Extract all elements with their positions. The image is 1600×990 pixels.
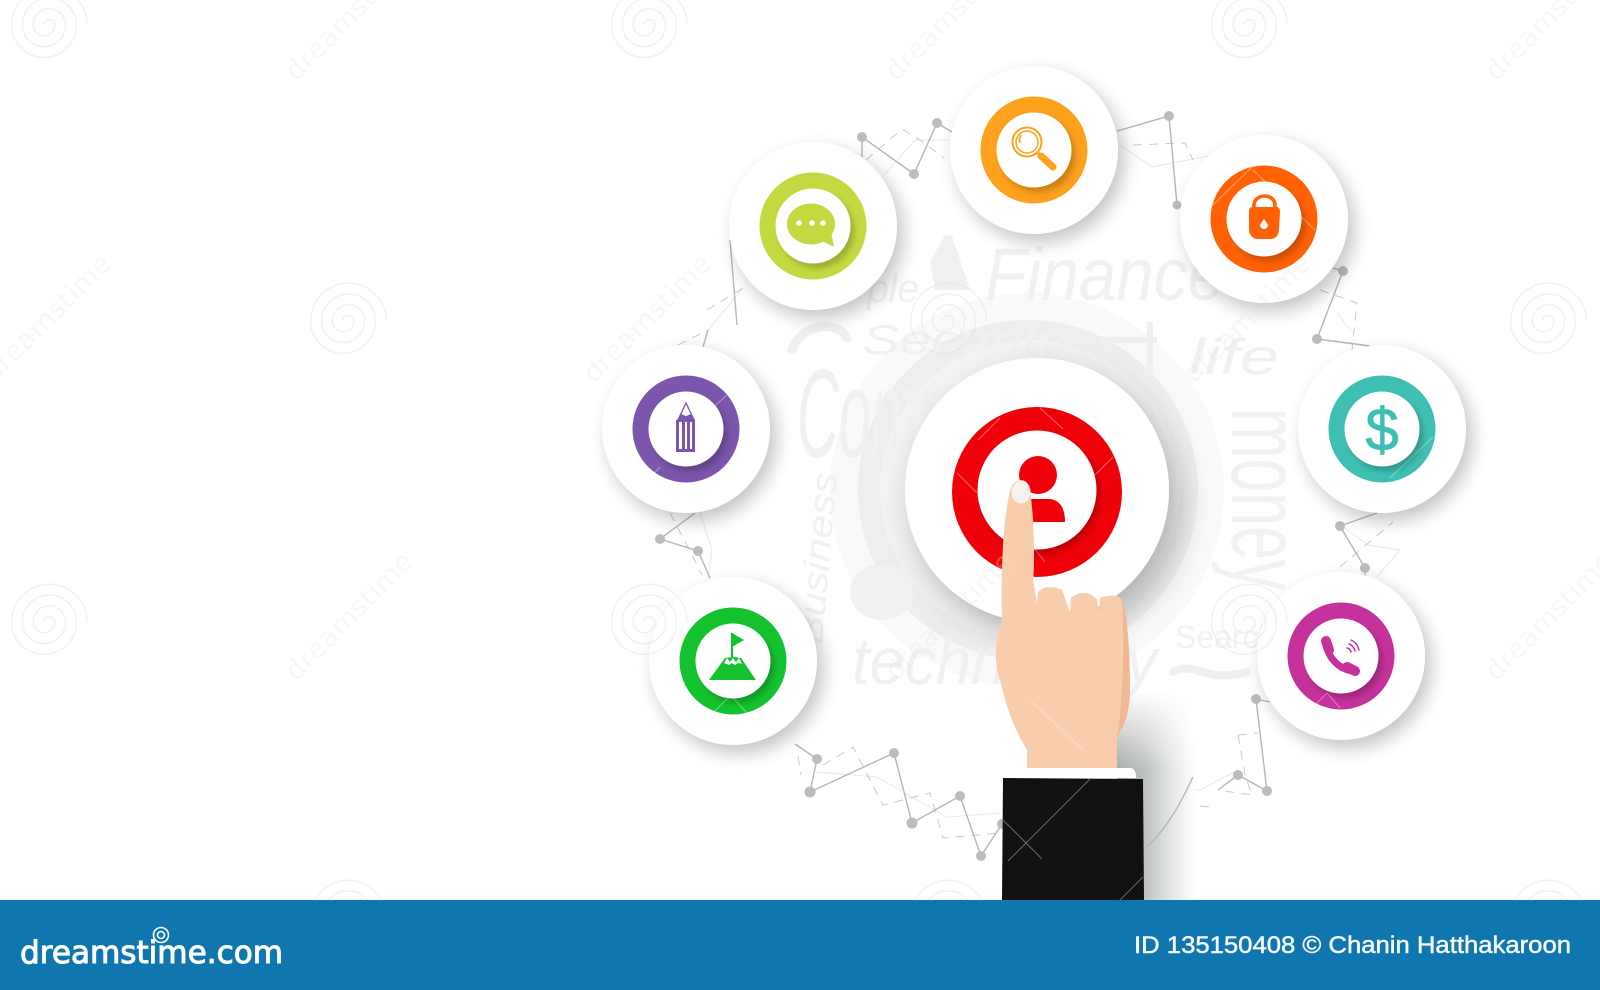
icon button: pencil — [602, 345, 770, 513]
icon: pencil — [676, 403, 695, 452]
icon button: mountain flag — [649, 577, 817, 745]
icon: speech bubble — [787, 204, 835, 247]
ghost words and shapes: Business — [789, 471, 845, 646]
watermark words: dreamstime — [577, 248, 718, 389]
ghost words and shapes: Search — [1175, 619, 1276, 655]
icon button: search — [950, 66, 1118, 234]
chart lines: bottom — [795, 744, 1007, 861]
chart lines: upper right — [1312, 266, 1370, 350]
hand — [996, 480, 1130, 768]
chart lines: top right — [1117, 111, 1208, 210]
icon button: chat — [729, 142, 897, 310]
ghost words and shapes: Security — [862, 316, 1070, 363]
ghost words and shapes: money — [1210, 408, 1322, 590]
chart lines: upper left — [678, 240, 743, 347]
icon: person — [1019, 456, 1065, 522]
icon button: lock — [1180, 135, 1348, 303]
icon button: dollar — [1298, 345, 1466, 513]
ghost words and shapes: life — [1189, 329, 1279, 385]
chart lines: left — [655, 513, 712, 578]
hand shape — [996, 480, 1130, 768]
image id and credit: ID 135150408 © Chanin Hatthakaroon — [1134, 932, 1571, 959]
main button — [905, 358, 1169, 622]
watermark words: dreamstime — [879, 546, 1020, 687]
ghost words and shapes — [789, 233, 1322, 698]
ghost words and shapes: Finance — [985, 233, 1225, 316]
sleeve shadow — [1117, 690, 1196, 900]
watermark words: dreamstime — [279, 546, 420, 687]
logo text: dreamstime.com — [20, 935, 283, 971]
bottom band — [0, 900, 1600, 990]
fingernail — [1012, 480, 1030, 504]
icon: padlock — [1249, 196, 1280, 239]
logo spiral — [154, 928, 168, 942]
watermark words — [0, 0, 1600, 687]
curved chart line beside sleeve — [1147, 777, 1193, 847]
ghost words and shapes: ple — [866, 267, 919, 311]
ghost words and shapes: Comm — [797, 345, 967, 484]
icon: mountain with flag — [709, 633, 756, 680]
ghost words and shapes: technology — [852, 624, 1161, 698]
black sleeve — [1002, 778, 1144, 900]
red ring — [952, 407, 1122, 577]
backdrop rings behind the main button — [830, 293, 1224, 687]
chart lines: top left — [857, 118, 952, 179]
chart lines: bottom right — [1147, 694, 1272, 807]
icon button: phone — [1257, 572, 1425, 740]
watermark words: dreamstime — [1177, 248, 1318, 389]
icon: phone handset — [1326, 640, 1359, 671]
chart lines: right — [1335, 513, 1400, 578]
icon: magnifying glass — [1012, 128, 1053, 167]
icon: dollar sign: $ — [1365, 396, 1399, 463]
white shirt cuff — [1027, 768, 1136, 778]
